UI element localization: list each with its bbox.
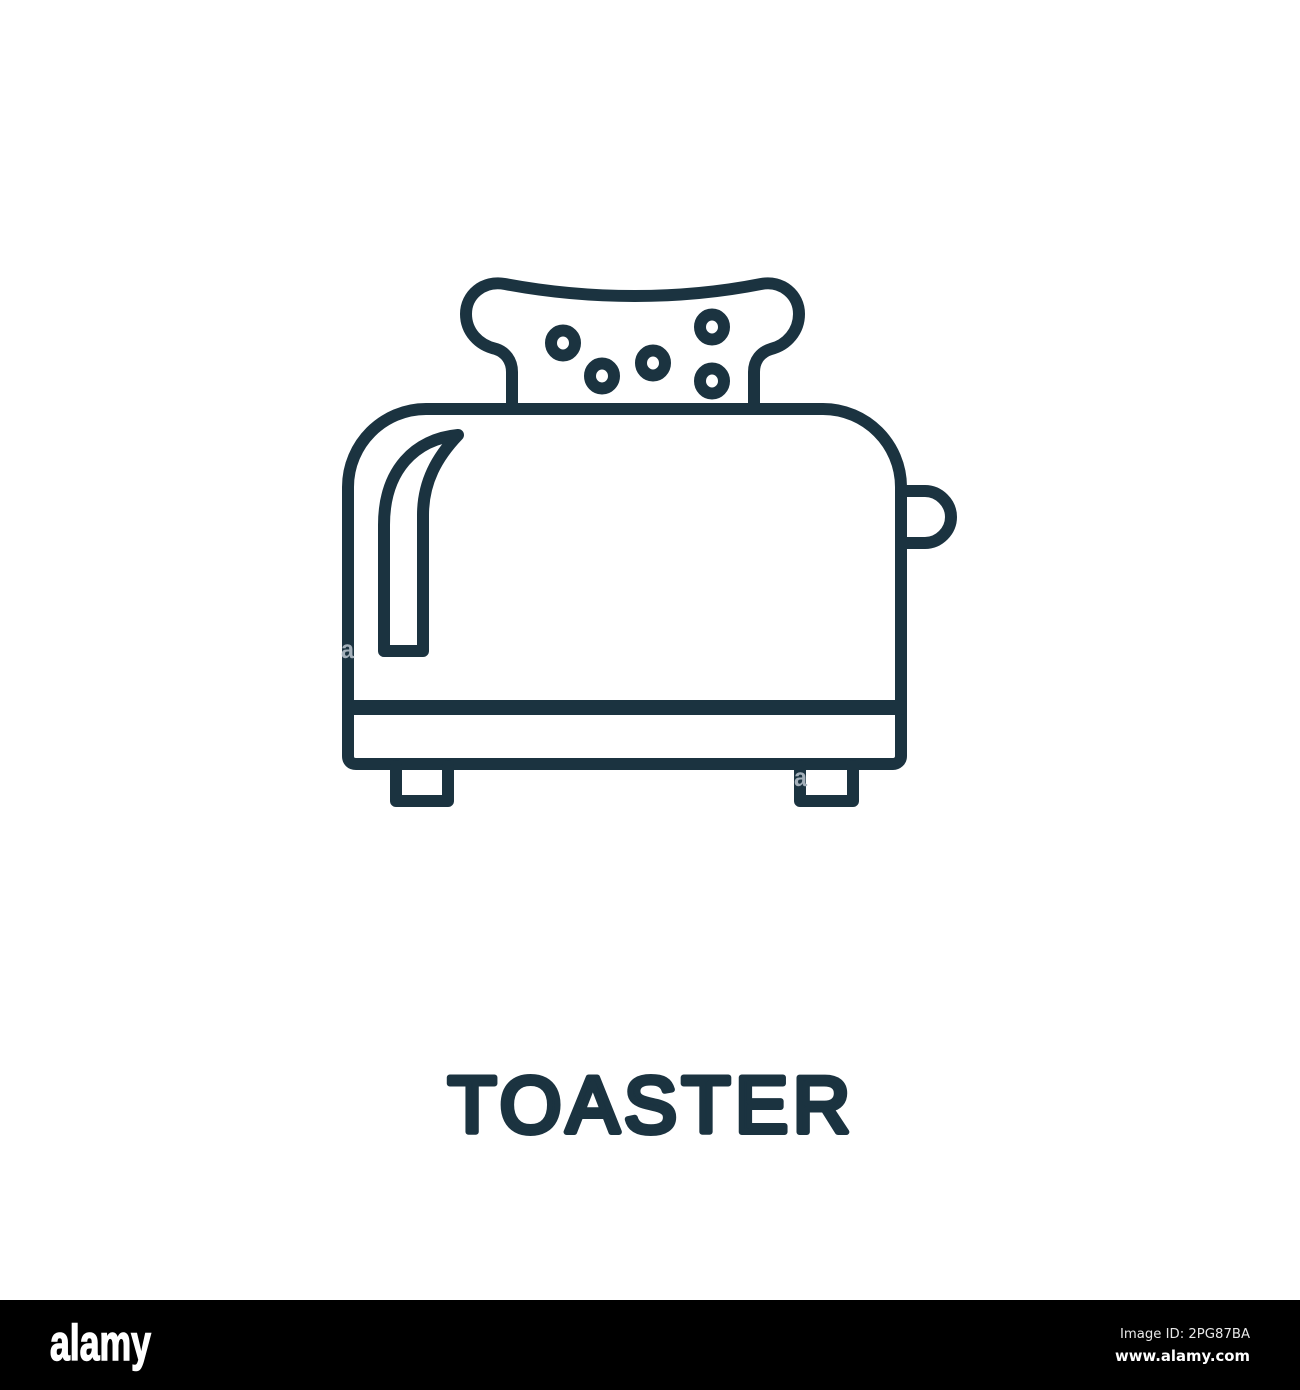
image id: Image ID: 2PG87BA xyxy=(1120,1327,1250,1342)
right foot xyxy=(800,766,853,801)
side knob xyxy=(902,491,951,543)
lever slot xyxy=(384,435,458,651)
left foot xyxy=(396,766,448,801)
watermark fragments: a xyxy=(794,762,807,792)
toast holes xyxy=(551,314,724,394)
footer bar xyxy=(0,1300,1300,1390)
body base band xyxy=(348,706,901,709)
watermark fragments xyxy=(341,634,807,792)
icon: toaster xyxy=(348,283,951,801)
watermark fragments: a xyxy=(341,634,354,664)
website: www.alamy.com xyxy=(1115,1347,1250,1365)
title: TOASTER xyxy=(448,1060,850,1149)
alamy logo: alamy xyxy=(50,1315,151,1371)
toast slice xyxy=(466,283,799,405)
toaster body xyxy=(348,409,901,764)
